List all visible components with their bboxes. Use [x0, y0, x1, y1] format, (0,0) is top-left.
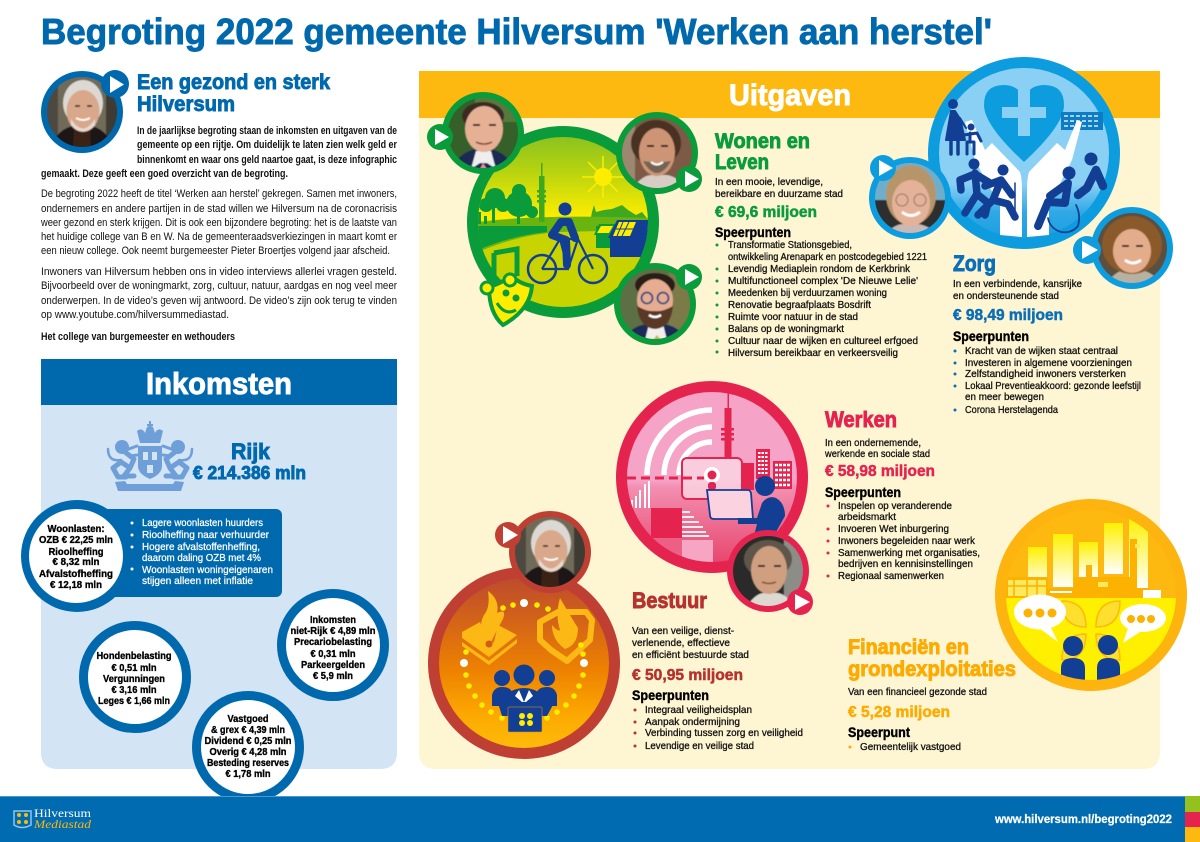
- text: wonen en leven: € 69,6 miljoen: [715, 204, 817, 221]
- list: speerpunten bestuur: Levendige en veilige stad: [645, 740, 754, 752]
- text: woonlasten bedragen: [39, 523, 113, 591]
- portrait: wethouder 3: [614, 263, 702, 345]
- text: inleiding vet: binnenkomt en waar ons geld naartoe gaat, is deze infographic: [137, 154, 397, 166]
- list: speerpunten wonen: Balans op de woningmarkt: [728, 323, 844, 335]
- callout: hondenbelasting: € 0,51 mln: [112, 662, 156, 674]
- list: speerpunten wonen: Ruimte voor natuur in de stad: [728, 311, 858, 323]
- text: zorg: In een verbindende, kansrijke: [953, 278, 1082, 290]
- portrait: burgemeester bestuur: [495, 511, 591, 593]
- text: inleiding vet: [41, 125, 397, 180]
- text: zorg: [953, 251, 1141, 416]
- portrait: burgemeester with play button: [41, 70, 129, 153]
- icon: toren: [721, 392, 734, 458]
- list: woonlasten punten: [130, 517, 273, 587]
- list: speerpunten werken: [826, 500, 980, 582]
- list: woonlasten punten: Lagere woonlasten huurders: [142, 517, 263, 529]
- portrait: wethouder zorg 1: [869, 155, 951, 239]
- text: woonlasten bedragen: € 8,32 mln: [52, 556, 100, 568]
- list: speerpunten zorg: Corona Herstelagenda: [965, 404, 1058, 416]
- icon: gebouwen: [742, 449, 792, 490]
- callout: hondenbelasting: € 3,16 mln: [112, 684, 156, 696]
- heading: een gezond en sterk: Hilversum: [137, 92, 235, 116]
- icon: politie: [462, 591, 517, 665]
- header: uitgaven: Uitgaven: [729, 79, 851, 112]
- callout: vastgoed: Overig € 4,28 mln: [210, 746, 286, 758]
- text: website: www.hilversum.nl/begroting2022: [994, 814, 1172, 826]
- list: speerpunten zorg: Lokaal Preventieakkoord: gezonde leefstijl: [965, 380, 1141, 392]
- text: alinea video: Inwoners van Hilversum hebben ons in video interviews allerlei vragen gesteld.: [41, 266, 397, 278]
- panel: inkomsten: [21, 359, 397, 798]
- callout: woonlasten: [21, 500, 282, 612]
- text: financien: € 5,28 miljoen: [848, 704, 950, 721]
- logo: hilversum mediastad: Hilversum: [34, 808, 91, 820]
- list: speerpunten wonen: ontwikkeling Arenapark en postcodegebied 1221: [728, 251, 927, 263]
- text: werken: [824, 407, 980, 582]
- icon: brandweer: [540, 598, 592, 661]
- list: speerpunten zorg: Zelfstandigheid inwoners versterken: [965, 368, 1126, 380]
- callout: inkomsten niet-rijk: niet-Rijk € 4,89 mln: [290, 625, 376, 637]
- text: alinea video: [41, 266, 397, 321]
- list: woonlasten punten: Woonlasten woningeigenaren: [142, 564, 273, 576]
- text: inleiding vet: gemaakt. Deze geeft een goed overzicht van de begroting.: [41, 168, 288, 180]
- list: speerpunten wonen: [716, 239, 927, 359]
- list: speerpunten wonen: Levendig Mediaplein rondom de Kerkbrink: [728, 263, 911, 275]
- callout: vastgoed: & grex € 4,39 mln: [211, 724, 285, 736]
- list: speerpunten zorg: [954, 345, 1141, 416]
- callout: inkomsten niet-rijk: € 5,9 mln: [313, 670, 353, 682]
- callout: vastgoed: € 1,78 mln: [226, 768, 270, 780]
- text: bestuur: en efficiënt bestuurde stad: [632, 649, 749, 661]
- text: inleiding vet: gemeente op een rijtje. Om duidelijk te laten zien welk geld er: [137, 139, 397, 151]
- list: speerpunten bestuur: [634, 704, 803, 752]
- text: alinea video: Bijvoorbeeld over de woningmarkt, zorg, cultuur, natuur, aardgas en nog veel meer: [41, 280, 397, 292]
- heading: wonen en leven: [715, 129, 810, 174]
- list: speerpunten bestuur: Verbinding tussen zorg en veiligheid: [645, 727, 803, 739]
- callout: inkomsten niet-rijk: € 0,31 mln: [310, 648, 356, 660]
- text: alinea begroting: een nieuw college. Ook neemt burgemeester Pieter Broertjes volgend jaar afscheid.: [41, 245, 390, 257]
- text: wonen en leven: bereikbare en duurzame stad: [715, 188, 843, 200]
- text: woonlasten bedragen: € 12,18 mln: [50, 579, 102, 591]
- list: speerpunten zorg: en meer bewegen: [965, 391, 1044, 403]
- text: bestuur: € 50,95 miljoen: [632, 667, 743, 684]
- text: wonen en leven: In een mooie, levendige,: [715, 176, 823, 188]
- text: financien: Speerpunt: [848, 725, 910, 740]
- list: speerpunten zorg: Kracht van de wijken staat centraal: [965, 345, 1118, 357]
- list: speerpunten werken: Samenwerking met organisaties,: [838, 547, 980, 559]
- panel background: [419, 118, 1160, 769]
- illustration: financien: [995, 499, 1187, 691]
- illustration: bestuur: [428, 511, 620, 759]
- list: woonlasten punten: Rioolheffing naar verhuurder: [142, 529, 269, 541]
- list: speerpunten wonen: Renovatie begraafplaats Bosdrift: [728, 299, 871, 311]
- icon: personen: [946, 99, 1103, 232]
- list: speerpunten werken: arbeidsmarkt: [838, 511, 896, 523]
- header: inkomsten: [41, 359, 397, 405]
- text: rijk: Rijk: [231, 439, 271, 464]
- icon: hart met kruis: [984, 85, 1064, 162]
- text: werken: Speerpunten: [825, 485, 901, 500]
- icon: huizen met zonnepanelen: [594, 220, 648, 257]
- list: woonlasten punten: daarom daling OZB met 4%: [142, 552, 261, 564]
- heading: financien en grondexploitaties: Financiën en: [848, 636, 969, 659]
- text: wonen en leven: [715, 129, 927, 359]
- icon: fietser: [528, 202, 607, 283]
- portrait: wethouder 2: [616, 112, 702, 194]
- text: bestuur: [632, 588, 803, 752]
- text: rijk: € 214.386 mln: [193, 463, 306, 483]
- list: speerpunten wonen: Transformatie Stationsgebied,: [728, 239, 852, 251]
- list: speerpunten werken: Inspelen op veranderende: [838, 500, 952, 512]
- callout: inkomsten niet-rijk: Parkeergelden: [301, 659, 365, 671]
- list: speerpunt financien: Gemeentelijk vastgoed: [860, 741, 961, 753]
- text: inleiding vet: In de jaarlijkse begroting staan de inkomsten en uitgaven van de: [137, 125, 397, 137]
- text: alinea begroting: weer gezond en sterk krijgen. Dit is ook een bijzondere begroting: het is de laatste van: [40, 217, 397, 229]
- text: bestuur: verlenende, effectieve: [632, 637, 730, 649]
- list: speerpunten wonen: Cultuur naar de wijken en cultureel erfgoed: [728, 335, 918, 347]
- icon: klaver: [1062, 601, 1120, 660]
- text: ondertekening: Het college van burgemeester en wethouders: [41, 331, 235, 343]
- icon: gebouw: [1061, 112, 1103, 130]
- vlakken en strepen: [632, 481, 713, 564]
- panel: introductie: [40, 70, 397, 343]
- callout: hondenbelasting: Vergunningen: [103, 673, 165, 685]
- text: werken: Werken: [825, 407, 897, 432]
- text: zorg: Speerpunten: [953, 329, 1029, 344]
- icon: muzieknoot en masker: [481, 249, 532, 325]
- callout: inkomsten niet-rijk: [282, 594, 384, 696]
- callout: vastgoed: [196, 696, 300, 798]
- heading: wonen en leven: Leven: [715, 150, 769, 174]
- list: speerpunten wonen: Meedenken bij verduurzamen woning: [728, 287, 887, 299]
- heading: een gezond en sterk: [137, 70, 330, 116]
- list: speerpunten werken: Invoeren Wet inburgering: [838, 523, 949, 535]
- title: Begroting 2022 gemeente Hilversum 'Werken aan herstel': [41, 11, 992, 52]
- text: alinea video: op www.youtube.com/hilversummediastad.: [41, 309, 229, 321]
- ring van stippen: [460, 599, 588, 721]
- list: speerpunten werken: Regionaal samenwerken: [838, 570, 944, 582]
- text: rijk: [193, 439, 306, 483]
- text: wonen en leven: Speerpunten: [715, 225, 791, 240]
- text: werken: In een ondernemende,: [825, 437, 921, 449]
- illustration: wonen en leven: [427, 92, 702, 345]
- icon: zon: [582, 156, 624, 198]
- list: speerpunten wonen: Multifunctioneel complex 'De Nieuwe Lelie': [728, 275, 918, 287]
- list: speerpunten bestuur: Integraal veiligheidsplan: [645, 704, 752, 716]
- callout: vastgoed: Besteding reserves: [207, 757, 289, 769]
- text: zorg: Zorg: [953, 251, 996, 276]
- text: zorg: € 98,49 miljoen: [953, 307, 1063, 324]
- heading: wonen en leven: Wonen en: [715, 129, 810, 153]
- text: woonlasten bedragen: Rioolheffing: [48, 546, 104, 558]
- icon: signaalbogen: [647, 410, 712, 475]
- callout: inkomsten niet-rijk: Precariobelasting: [294, 636, 372, 648]
- list: speerpunten zorg: Investeren in algemene voorzieningen: [965, 357, 1132, 369]
- text: alinea video: onderwerpen. In de video’s geven wij antwoord. De video’s zijn ook terug te vinden: [41, 295, 397, 307]
- text: woonlasten bedragen: Afvalstofheffing: [39, 568, 113, 580]
- logo: hilversum mediastad: [14, 808, 91, 831]
- callout: hondenbelasting: Leges € 1,66 mln: [98, 695, 170, 707]
- text: woonlasten bedragen: OZB € 22,25 mln: [39, 534, 113, 546]
- text: financien: Van een financieel gezonde stad: [848, 686, 987, 698]
- icon: tekstballon links: [1014, 594, 1066, 642]
- text: alinea begroting: ondernemers en andere partijen in de stad willen we Hilversum na de coronacrisis: [41, 203, 397, 215]
- heading: financien en grondexploitaties: grondexploitaties: [848, 658, 1016, 681]
- icon: toren: [537, 163, 546, 222]
- text: alinea begroting: het huidige college van B en W. Na de gemeenteraadsverkiezingen in maart komt er: [41, 231, 397, 243]
- text: bestuur: Bestuur: [632, 588, 707, 613]
- panel background: [41, 359, 397, 769]
- logo: hilversum mediastad: Mediastad: [33, 819, 91, 831]
- header: uitgaven: [419, 71, 1160, 118]
- text: zorg: en ondersteunende stad: [953, 290, 1059, 302]
- text: bestuur: Speerpunten: [632, 688, 709, 703]
- portrait: wethouder zorg 2: [1073, 207, 1173, 289]
- icon: handen: [965, 120, 1082, 237]
- list: woonlasten punten: Hogere afvalstoffenheffing,: [142, 541, 260, 553]
- icon: personen: [1061, 635, 1120, 680]
- text: alinea begroting: [40, 188, 397, 257]
- icon: tekstballon rechts: [1120, 604, 1166, 643]
- callout: hondenbelasting: [84, 626, 186, 728]
- footer: [0, 796, 1200, 842]
- icon: college achter spreekgestoelte: [492, 664, 557, 732]
- text: werken: € 58,98 miljoen: [825, 463, 935, 480]
- callout: hondenbelasting: Hondenbelasting: [96, 650, 172, 662]
- text: financien: [848, 636, 1016, 753]
- portrait: wethouder 1: [427, 92, 524, 174]
- illustration: werken: [616, 381, 813, 615]
- panel: uitgaven: [419, 57, 1187, 769]
- text: werken: werkende en sociale stad: [824, 448, 930, 460]
- icon: rijkswapen: [108, 421, 192, 491]
- list: speerpunten werken: bedrijven en kennisinstellingen: [838, 558, 973, 570]
- icon: bomen: [478, 184, 538, 224]
- icon: scherm: [682, 458, 742, 499]
- header: inkomsten: Inkomsten: [146, 366, 292, 401]
- callout: inkomsten niet-rijk: Inkomsten: [310, 614, 356, 626]
- icon: stadsgebouwen: [1006, 518, 1161, 598]
- icon: persoon met laptop: [707, 476, 785, 532]
- list: speerpunten wonen: Hilversum bereikbaar en verkeersveilig: [728, 347, 898, 359]
- text: bestuur: Van een veilige, dienst-: [632, 625, 734, 637]
- list: speerpunten werken: Inwoners begeleiden naar werk: [838, 535, 976, 547]
- illustration: zorg: [869, 57, 1173, 289]
- list: speerpunten bestuur: Aanpak ondermijning: [645, 716, 740, 728]
- text: woonlasten bedragen: Woonlasten:: [48, 523, 104, 535]
- heading: een gezond en sterk: Een gezond en sterk: [137, 70, 330, 94]
- text: alinea begroting: De begroting 2022 heeft de titel ‘Werken aan herstel’ gekregen. Samen met inwoners,: [41, 188, 397, 200]
- heading: financien en grondexploitaties: [848, 636, 1016, 681]
- list: woonlasten punten: stijgen alleen met inflatie: [142, 575, 253, 587]
- kleurenbalk: [1185, 796, 1200, 842]
- callout: vastgoed: Dividend € 0,25 mln: [204, 735, 292, 747]
- portrait: wethouder werken: [727, 530, 813, 615]
- callout: vastgoed: Vastgoed: [228, 713, 268, 725]
